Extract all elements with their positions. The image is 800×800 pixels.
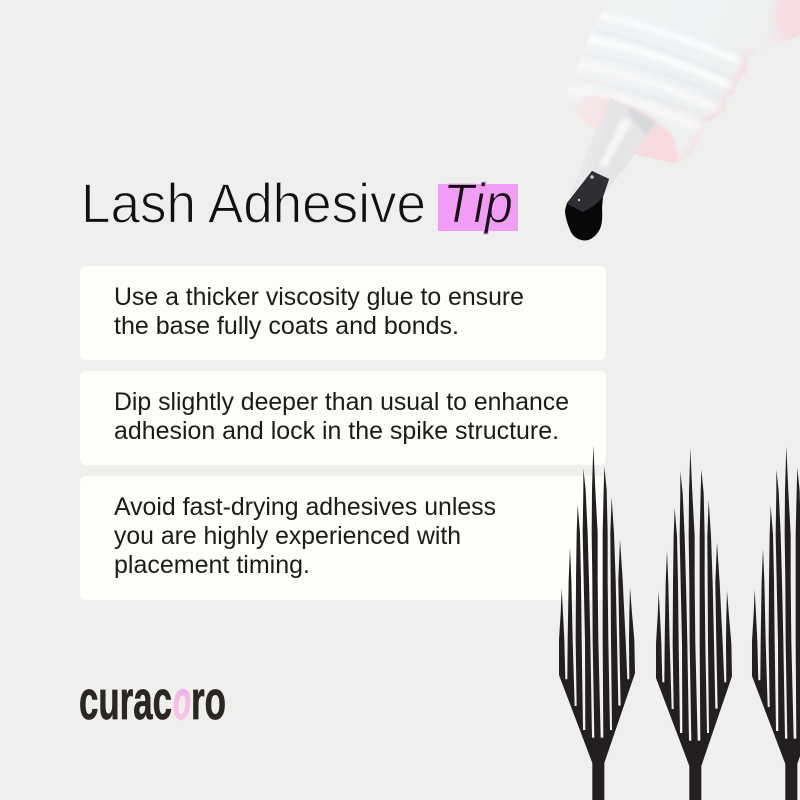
card 1: Use a thicker viscosity glue to ensure	[114, 283, 524, 311]
title highlight: Tip	[438, 184, 518, 231]
card 1: the base fully coats and bonds.	[114, 312, 459, 340]
lash fan 3	[752, 446, 800, 800]
logo: curacoro: o	[173, 669, 191, 731]
card 1	[80, 266, 606, 360]
lash fan 2	[656, 448, 732, 800]
title: Lash Adhesive	[81, 172, 426, 234]
card 3: Avoid fast-drying adhesives unless	[114, 493, 496, 521]
card 3	[80, 476, 606, 600]
glue drop	[565, 171, 609, 240]
glue highlights	[590, 175, 594, 179]
logo: curacoro: curac	[79, 669, 172, 731]
icon: adhesive bottle	[560, 0, 800, 240]
card 2: adhesion and lock in the spike structure.	[114, 417, 559, 445]
card 3: you are highly experienced with	[114, 522, 461, 550]
opening interior	[582, 96, 678, 163]
pink edge glow	[705, 52, 750, 128]
nozzle	[567, 98, 656, 203]
title: Tip	[443, 172, 513, 234]
card 3: placement timing.	[114, 551, 310, 579]
bottle body and threads	[560, 0, 800, 170]
card 2: Dip slightly deeper than usual to enhance	[114, 388, 569, 416]
card 2	[80, 371, 606, 465]
lash fan 1	[559, 445, 635, 800]
logo: curacoro: ro	[191, 669, 226, 731]
